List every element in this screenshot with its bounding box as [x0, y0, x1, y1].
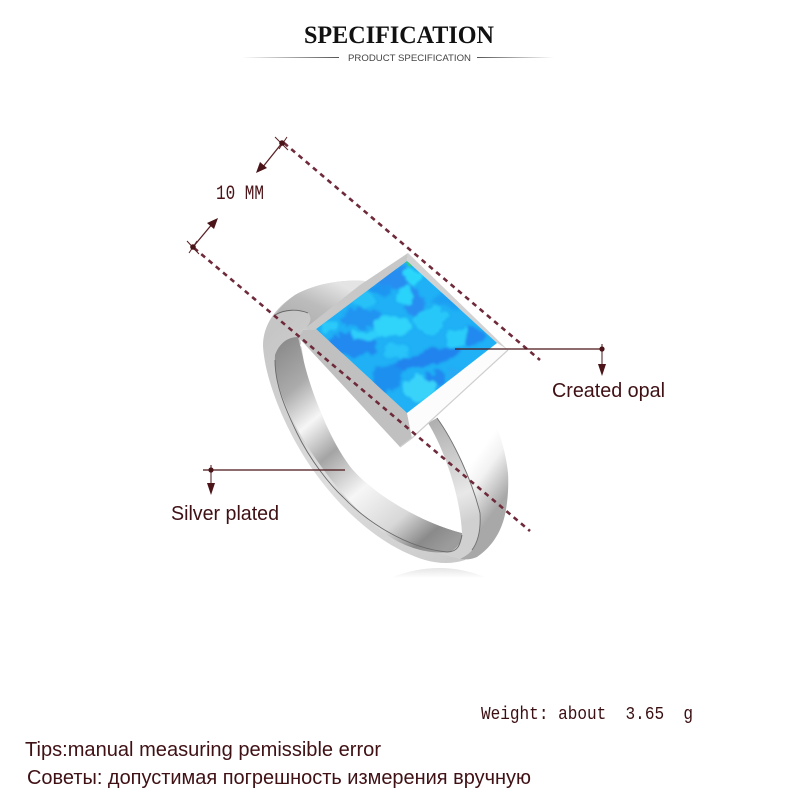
ring right outer face — [437, 405, 508, 559]
ring shadow — [390, 568, 487, 578]
dimension arrow: upper — [256, 137, 288, 173]
tips russian: Советы: допустимая погрешность измерения вручную — [27, 767, 531, 789]
callout: silver plated: Silver plated — [171, 503, 279, 525]
ring opening — [300, 338, 462, 533]
ring right edge line — [437, 418, 480, 550]
ring edge lines — [275, 360, 462, 552]
subtitle with rules: PRODUCT SPECIFICATION — [348, 53, 471, 64]
ring band outer surface — [263, 281, 472, 563]
opal stone — [316, 261, 497, 413]
setting top right face — [407, 253, 508, 350]
setting left face — [298, 329, 412, 447]
ring band seam — [275, 310, 308, 315]
setting lower edge — [400, 350, 508, 447]
callout: created opal — [455, 344, 665, 402]
callout: created opal: Created opal — [552, 380, 665, 402]
title: SPECIFICATION — [304, 22, 494, 49]
setting lower right face — [407, 343, 508, 438]
dimension arrow: lower — [187, 218, 218, 254]
ring illustration — [263, 253, 508, 578]
weight note: Weight: about 3.65 g — [481, 705, 693, 725]
ring band top surface — [275, 281, 380, 335]
dimension label: 10 MM — [216, 183, 264, 206]
dashed dimension lines — [194, 143, 540, 531]
setting upper left face — [303, 253, 408, 330]
setting base — [298, 253, 508, 447]
callout: silver plated — [171, 465, 345, 525]
ring inner surface — [275, 337, 462, 553]
ring right inner strip — [428, 418, 480, 559]
tips english: Tips:manual measuring pemissible error — [25, 739, 381, 761]
